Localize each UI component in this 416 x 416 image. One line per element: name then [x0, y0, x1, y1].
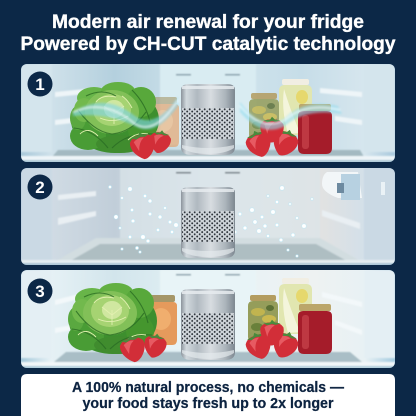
device [181, 289, 235, 360]
food: jars [148, 278, 332, 354]
panel: step 2 [21, 168, 395, 265]
air flow waves [73, 97, 342, 130]
food: strawberries [117, 320, 301, 365]
badge 3: 3 [35, 282, 45, 301]
title: Modern air renewal for your fridge [52, 12, 364, 33]
callout [21, 374, 395, 416]
panel: step 3 [21, 270, 395, 368]
callout: A 100% natural process, no chemicals — [72, 379, 344, 396]
title [20, 12, 396, 55]
food: strawberries [127, 117, 301, 162]
badge 2 [28, 174, 52, 200]
sparkles [108, 186, 313, 257]
title: Powered by CH-CUT catalytic technology [20, 34, 396, 55]
badge 3 [28, 278, 52, 304]
food: lettuce [70, 82, 159, 153]
fixture: fridge light [322, 172, 385, 200]
device [181, 84, 235, 155]
badge 2: 2 [35, 178, 45, 197]
device [181, 187, 235, 258]
panel: step 1 [21, 64, 395, 162]
badge 1 [28, 72, 52, 96]
callout: your food stays fresh up to 2x longer [82, 395, 334, 412]
badge 1: 1 [35, 75, 45, 94]
food: lettuce [68, 283, 157, 354]
food: jars [150, 79, 332, 154]
